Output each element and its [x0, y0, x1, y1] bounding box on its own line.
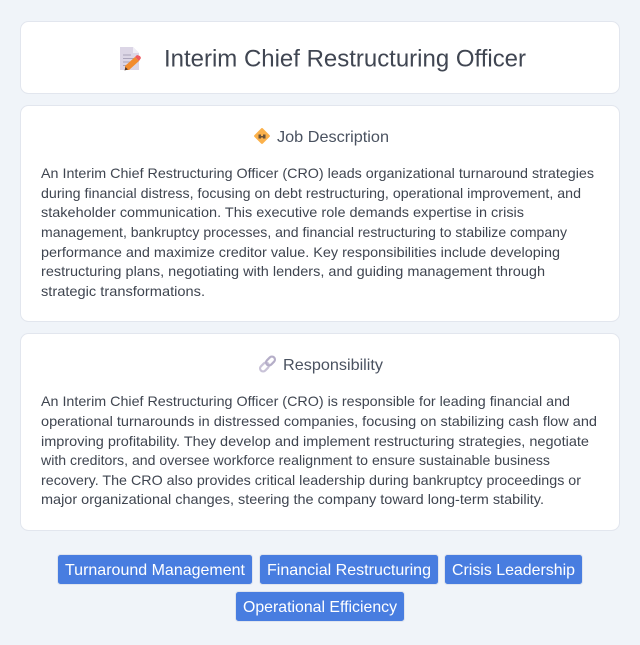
tag: operational efficiency: Operational Efficiency	[243, 599, 397, 616]
text block: responsibility: improving profitability. They develop and implement restructuring strategies, negotiate	[41, 433, 589, 449]
text block: responsibility: recovery. The CRO also provides critical leadership during bankruptcy proceedings or	[41, 472, 581, 488]
tag: operational efficiency	[236, 592, 404, 622]
panel: responsibility	[20, 334, 620, 530]
icon: chain link	[259, 355, 276, 373]
tag: turnaround management: Turnaround Management	[65, 562, 246, 579]
panel: job description	[20, 106, 620, 322]
panel: title	[20, 22, 620, 94]
text block: responsibility: An Interim Chief Restructuring Officer (CRO) is responsible for leading financial and	[41, 393, 570, 409]
heading: job description: Job Description	[277, 129, 389, 146]
icon: diamond sign	[254, 128, 270, 144]
text block: responsibility: major organizational changes, steering the company toward long-term stability.	[41, 491, 544, 507]
text block: job description: An Interim Chief Restructuring Officer (CRO) leads organizational turnaround strategies	[41, 165, 594, 181]
tag: crisis leadership	[444, 554, 582, 584]
icon: document with pencil	[120, 47, 141, 70]
text block: responsibility	[40, 393, 597, 507]
text block: job description: stakeholder communication. This executive role demands expertise in crisis	[41, 204, 524, 220]
tag: financial restructuring: Financial Restructuring	[267, 562, 431, 579]
text block: job description: restructuring plans, negotiating with lenders, and guiding management through	[41, 263, 545, 279]
text block: job description: strategic transformations.	[41, 283, 205, 299]
tag: financial restructuring	[260, 554, 438, 584]
tag: turnaround management	[58, 554, 252, 584]
title text: Interim Chief Restructuring Officer	[164, 46, 526, 72]
text block: responsibility: with creditors, and oversee workforce realignment to ensure sustainable business	[40, 452, 550, 468]
heading: responsibility: Responsibility	[283, 357, 383, 374]
text block: job description: performance and maximize creditor value. Key responsibilities include developing	[41, 244, 560, 260]
tag: crisis leadership: Crisis Leadership	[452, 562, 575, 579]
text block: job description: during financial distress, focusing on debt restructuring, operational improvement, and	[41, 185, 581, 201]
text block: responsibility: operational turnarounds in distressed companies, focusing on stabilizing cash flow and	[41, 413, 597, 429]
text block: job description	[41, 165, 594, 299]
text block: job description: management, bankruptcy processes, and financial restructuring to stabilize company	[41, 224, 567, 240]
